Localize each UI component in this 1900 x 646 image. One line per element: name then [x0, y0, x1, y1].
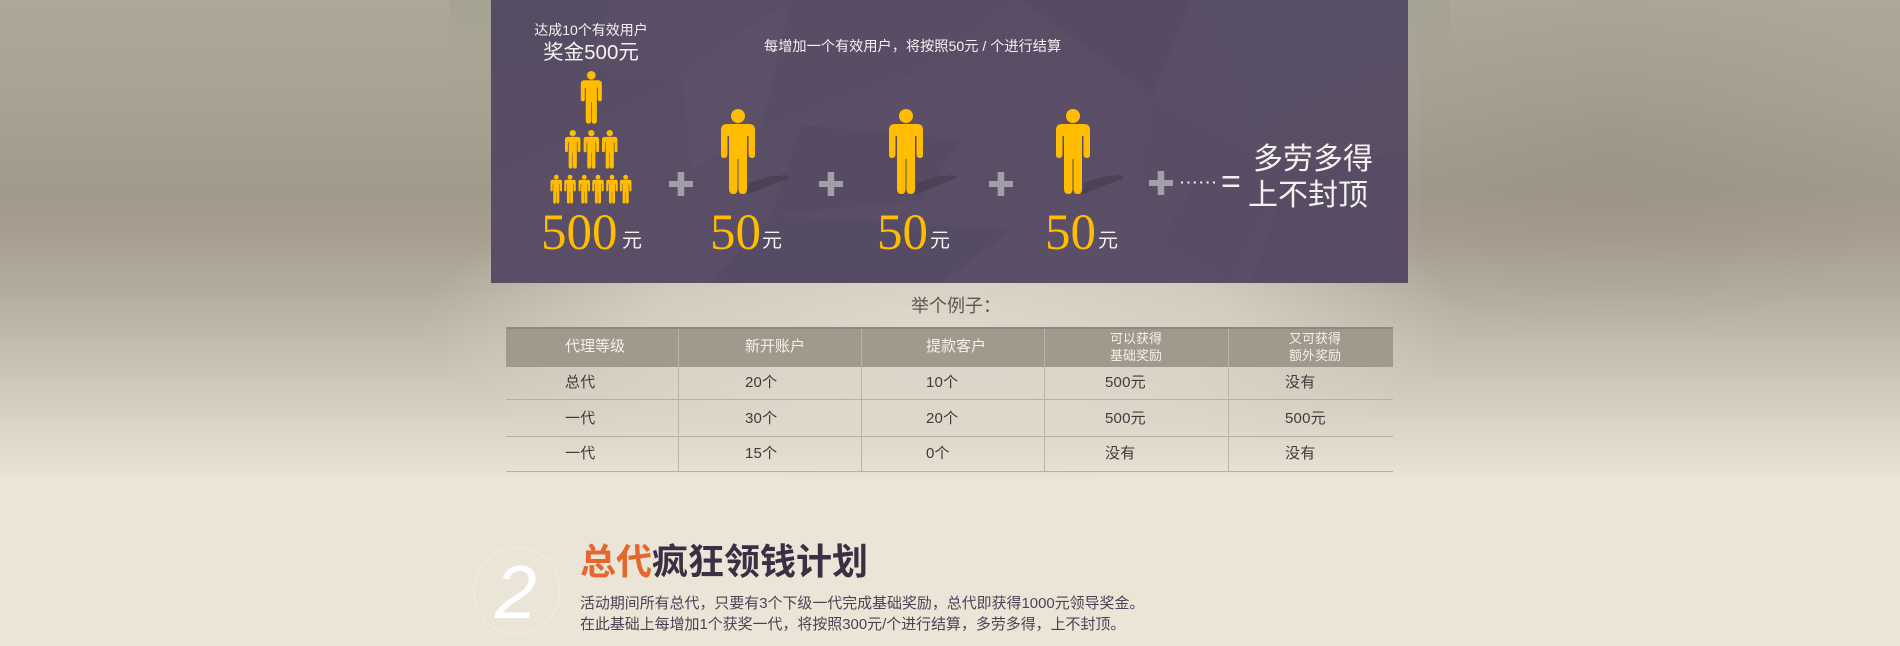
- row 1: 总代: [565, 374, 595, 391]
- callout: more work more pay: 多劳多得: [1253, 143, 1373, 176]
- text: amount 500: 500: [541, 205, 618, 261]
- number: section 2: 2: [495, 550, 537, 634]
- text: unit: 元: [930, 230, 950, 252]
- table header row: [506, 327, 1393, 367]
- text: amount 50: 50: [710, 205, 761, 261]
- table: example: 15个: [745, 445, 777, 462]
- text: unit: 元: [762, 230, 782, 252]
- table: example: 没有: [1105, 445, 1135, 462]
- row separators: [506, 399, 1393, 400]
- table: example: 又可获得: [1289, 331, 1341, 346]
- icon: person 2 with shadow: [889, 109, 957, 194]
- table: example: 10个: [926, 374, 958, 391]
- icon: circle with diagonal: [464, 537, 568, 642]
- table: example: 额外奖励: [1289, 348, 1341, 363]
- text: amount 50: 50: [877, 205, 928, 261]
- chart: person icons: [550, 71, 1215, 204]
- table: example: 没有: [1285, 374, 1315, 391]
- heading: bonus 500: 奖金500元: [543, 41, 639, 64]
- icon: ellipsis dots: [1181, 182, 1215, 184]
- background: right side shade: [1420, 0, 1900, 330]
- table: example: 没有: [1285, 445, 1315, 462]
- row 2: 一代: [565, 410, 595, 427]
- header cells: 代理等级: [565, 338, 625, 355]
- table: example: 20个: [745, 374, 777, 391]
- background: centre glow: [420, 200, 1460, 476]
- table: example: 500元: [1105, 374, 1146, 391]
- table: example: 30个: [745, 410, 777, 427]
- text: amount 50: 50: [1045, 205, 1096, 261]
- heading: example: 举个例子：: [911, 296, 1001, 316]
- row 3: 一代: [565, 445, 595, 462]
- text: section description: [580, 595, 1144, 633]
- icon: plus signs: [669, 171, 1173, 196]
- table: example: 0个: [926, 445, 950, 462]
- text: section description: 活动期间所有总代，只要有3个下级一代完成基础奖励，总代即获得1000元领导奖金。: [580, 595, 1144, 612]
- table: example: 可以获得: [1110, 331, 1162, 346]
- icon: person 1 with shadow: [721, 109, 789, 194]
- table: example: 20个: [926, 410, 958, 427]
- text: unit: 元: [1098, 230, 1118, 252]
- text: unit: 元: [622, 230, 642, 252]
- callout: more work more pay: [1248, 143, 1373, 212]
- panel facets: [491, 0, 1408, 283]
- background: side strip: [449, 0, 1450, 90]
- icon: person pyramid: [550, 71, 631, 204]
- table: example: 500元: [1285, 410, 1326, 427]
- text: per-user settlement: 每增加一个有效用户，将按照50元 / 个进行结算: [764, 39, 1061, 55]
- column separators: [678, 329, 679, 471]
- text: equals sign: =: [1221, 163, 1241, 201]
- heading: section title: 总代疯狂领钱计划: [580, 541, 868, 582]
- panel: purple reward panel: [491, 0, 1408, 283]
- table: example: 基础奖励: [1110, 348, 1162, 363]
- icon: person 3 with shadow: [1056, 109, 1124, 194]
- table: example: 500元: [1105, 410, 1146, 427]
- table: example: 提款客户: [926, 338, 986, 355]
- background: [0, 0, 1900, 476]
- heading: bonus for 10 users: 达成10个有效用户: [534, 22, 648, 38]
- callout: more work more pay: 上不封顶: [1248, 179, 1368, 212]
- table: example: 新开账户: [745, 338, 805, 355]
- table: example: [506, 327, 1393, 472]
- text: section description: 在此基础上每增加1个获奖一代，将按照300元/个进行结算，多劳多得，上不封顶。: [580, 616, 1125, 633]
